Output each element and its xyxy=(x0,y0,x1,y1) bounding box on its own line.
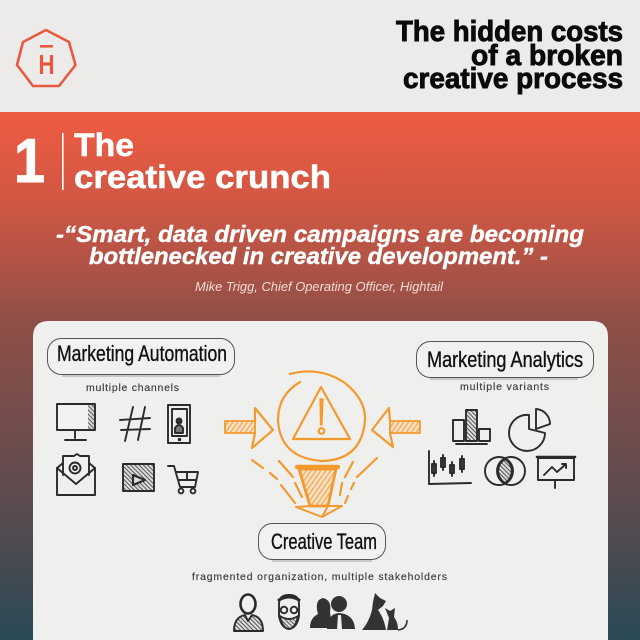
icon: shopping cart xyxy=(168,466,198,493)
label: Marketing Analytics xyxy=(416,342,594,379)
caption: multiple variants: multiple variants xyxy=(460,381,549,393)
icon: phone xyxy=(168,405,190,443)
caption: multiple channels: multiple channels xyxy=(86,382,179,394)
icon: video xyxy=(123,464,154,491)
section heading: The xyxy=(74,127,134,163)
icon: woman xyxy=(234,594,263,631)
arrow: down to creative team xyxy=(296,467,342,517)
label: Marketing Automation xyxy=(48,338,234,376)
section number: 1 xyxy=(14,127,45,196)
caption: fragmented organization: fragmented organization, multiple stakeholders xyxy=(192,571,447,583)
icon: pie chart xyxy=(509,409,550,451)
quote attribution: Mike Trigg, Chief Operating Officer, Hightail xyxy=(195,279,444,294)
number divider xyxy=(62,133,64,190)
icon: candlestick chart xyxy=(429,451,471,484)
panel: diagram xyxy=(33,321,608,640)
icon: bar chart xyxy=(453,410,490,444)
header band xyxy=(0,0,640,112)
arrow: left into warning xyxy=(225,408,273,448)
arrow: right into warning xyxy=(372,408,420,447)
icon: monitor xyxy=(57,404,95,440)
icon: venn diagram xyxy=(485,457,525,485)
title: creative process xyxy=(403,63,623,95)
quote xyxy=(56,221,584,269)
label: Creative Team: Creative Team xyxy=(271,529,377,554)
motion dashes xyxy=(252,458,377,503)
icon: couple xyxy=(310,596,355,629)
quote: -“Smart, data driven campaigns are becoming xyxy=(56,221,584,247)
title: of a broken xyxy=(471,40,623,72)
icon: warning circle xyxy=(278,371,365,461)
icon: bearded man xyxy=(279,595,299,629)
label: Marketing Automation: Marketing Automation xyxy=(57,341,227,366)
icon: Hightail logo xyxy=(17,30,76,86)
icon: email envelope xyxy=(57,454,95,495)
icon: presentation board xyxy=(537,457,575,488)
title: The hidden costs xyxy=(396,16,623,48)
quote: bottlenecked in creative development.” - xyxy=(89,243,548,269)
section heading xyxy=(74,127,331,195)
section heading: creative crunch xyxy=(74,159,331,195)
icon: dog and cat xyxy=(362,593,407,630)
label: Creative Team xyxy=(258,524,386,561)
label: Marketing Analytics: Marketing Analytics xyxy=(427,347,583,372)
icon: hashtag xyxy=(120,407,150,441)
title xyxy=(396,16,623,95)
